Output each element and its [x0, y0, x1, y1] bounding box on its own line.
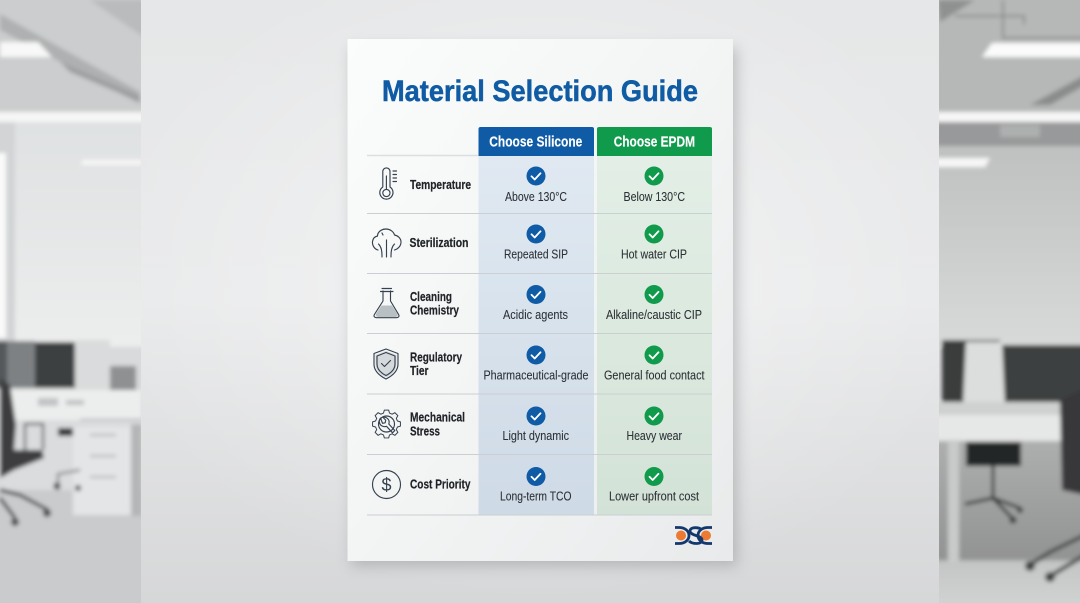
label: Mechanical	[410, 411, 465, 425]
poster shadow	[351, 48, 737, 566]
row: Cleaning Chemistry	[374, 285, 702, 322]
label: Temperature	[410, 178, 471, 192]
check: silicone	[526, 166, 546, 186]
header: Choose EPDM: Choose EPDM	[614, 134, 695, 151]
icon: flask	[374, 288, 399, 318]
label: Cost Priority	[410, 478, 471, 492]
value: silicone: Acidic agents	[503, 307, 568, 322]
label: Cleaning	[410, 290, 452, 304]
check: EPDM	[644, 467, 664, 486]
poster panel	[348, 39, 733, 561]
value: silicone: Pharmaceutical-grade	[484, 368, 588, 382]
label: Chemistry	[410, 304, 459, 318]
label	[410, 350, 462, 378]
column: Choose Silicone	[478, 127, 594, 516]
title: Material Selection Guide	[382, 75, 698, 108]
row: Mechanical Stress	[373, 406, 683, 443]
label: Sterilization	[410, 236, 468, 250]
label: Tier	[410, 364, 429, 378]
label: Stress	[410, 424, 440, 438]
check: silicone	[526, 467, 546, 486]
check: silicone	[526, 224, 546, 244]
value: EPDM: General food contact	[604, 368, 705, 382]
background: right office scene	[936, 0, 1080, 603]
check: silicone	[526, 406, 546, 426]
row: Sterilization	[372, 224, 687, 262]
check: silicone	[526, 346, 546, 364]
value: EPDM: Hot water CIP	[621, 246, 687, 262]
header: Choose Silicone	[478, 127, 594, 156]
value: silicone: Repeated SIP	[504, 246, 568, 262]
check: EPDM	[644, 406, 664, 426]
check: silicone	[526, 285, 546, 304]
label: Regulatory	[410, 350, 462, 364]
header: Choose EPDM	[597, 127, 712, 156]
logo	[675, 528, 712, 544]
column: Choose EPDM	[597, 127, 712, 516]
icon: steam cloud	[372, 229, 401, 257]
value: EPDM: Alkaline/caustic CIP	[606, 307, 702, 322]
check: EPDM	[644, 166, 664, 186]
check: EPDM	[644, 285, 664, 304]
value: EPDM: Lower upfront cost	[609, 489, 699, 504]
check: EPDM	[644, 224, 664, 244]
wall behind the poster	[141, 0, 939, 603]
header: Choose Silicone: Choose Silicone	[489, 134, 582, 151]
label	[410, 290, 459, 318]
value: silicone: Light dynamic	[502, 428, 569, 443]
value: EPDM: Heavy wear	[626, 428, 683, 443]
value: EPDM: Below 130°C	[624, 189, 685, 204]
row: Temperature	[380, 166, 685, 204]
background: left office scene	[0, 0, 145, 603]
value: silicone: Above 130°C	[505, 189, 567, 204]
value: silicone: Long-term TCO	[500, 489, 572, 504]
check: EPDM	[644, 346, 664, 364]
icon: gear and wrench	[373, 410, 400, 438]
row: Regulatory Tier	[374, 346, 705, 382]
label	[410, 411, 465, 438]
icon: thermometer	[380, 168, 396, 199]
icon: shield	[374, 349, 398, 379]
row: Cost Priority	[372, 467, 699, 504]
icon: dollar coin	[372, 470, 400, 498]
icon: dollar coin: $	[381, 475, 392, 495]
